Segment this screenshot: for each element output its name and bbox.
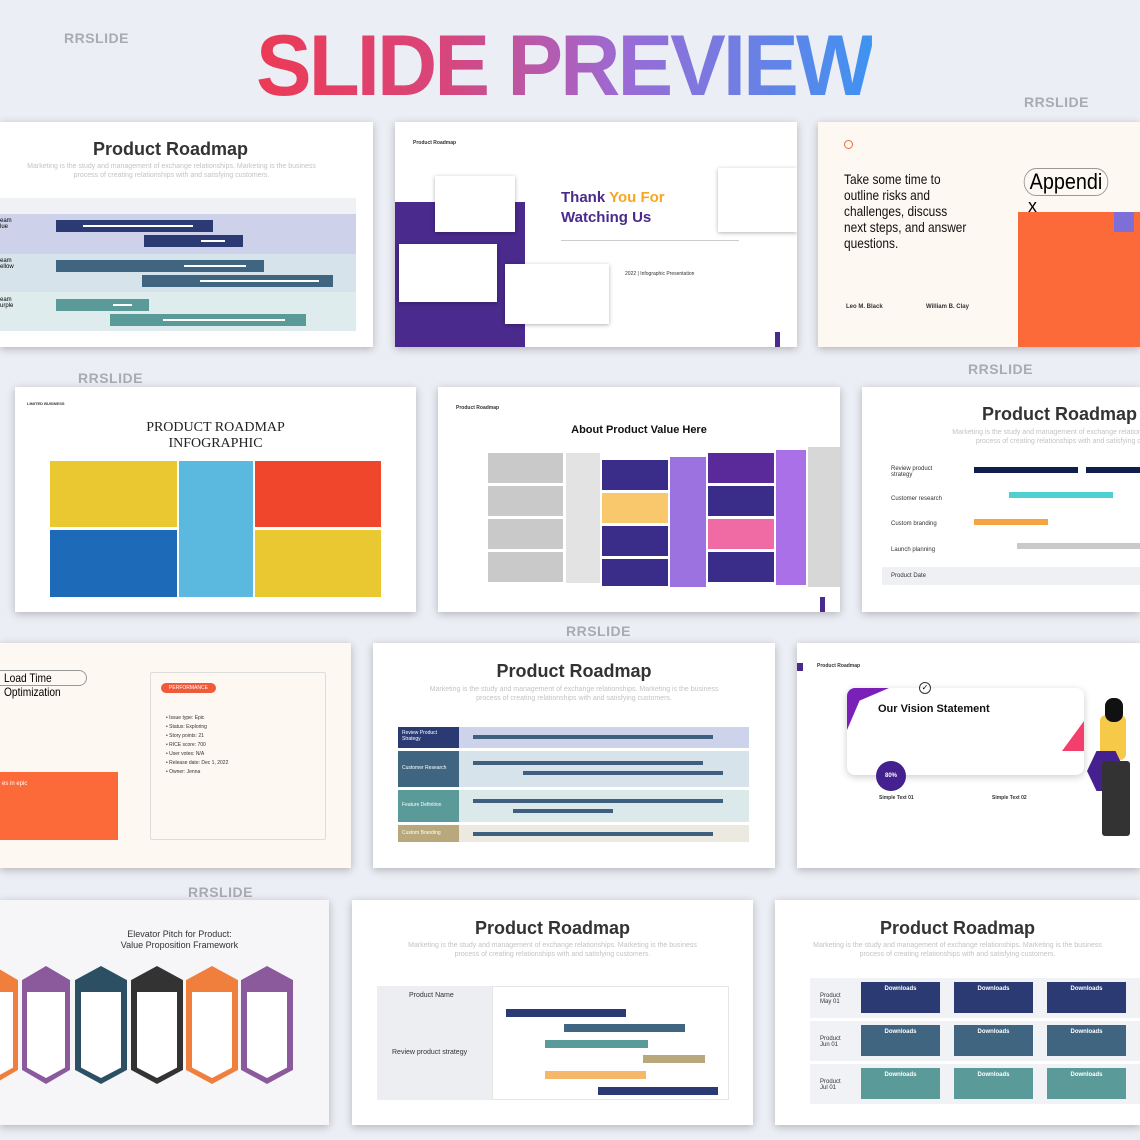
- slide 3: appendix: next steps, and answer: [844, 219, 966, 235]
- slide 3: appendix: questions.: [844, 235, 898, 251]
- slide 11: product roadmap timeline: Review product strategy: [392, 1049, 467, 1056]
- slide 12: product roadmap downloads grid: process of creating relationships with and satisfying customers.: [860, 951, 1055, 958]
- slide 8: product roadmap bands: Customer Research: [402, 765, 446, 771]
- slide 12: product roadmap downloads grid: Jul 01: [820, 1085, 836, 1091]
- slide 12: product roadmap downloads grid: Downloads: [977, 1072, 1010, 1078]
- slide 4: product roadmap infographic: [15, 387, 416, 612]
- title: SLIDE PREVIEW: [256, 18, 872, 114]
- slide 1: product roadmap gantt: Product Roadmap: [93, 139, 248, 159]
- slide 9: vision statement: Simple Text 01: [879, 795, 914, 801]
- slide 4: product roadmap infographic: PRODUCT ROADMAP: [146, 420, 285, 435]
- slide 2: thank you: Thank You For: [561, 189, 665, 206]
- watermark: RRSLIDE: [1024, 94, 1089, 110]
- slide 7: load time: • Story points: 21: [166, 733, 204, 739]
- slide 6: product roadmap gantt: Product Date: [891, 573, 926, 579]
- slide 8: product roadmap bands: Review Product Strategy: [402, 730, 437, 742]
- slide 7: load time: PERFORMANCE: [169, 685, 208, 691]
- slide 5: about product value: About Product Value Here: [571, 424, 707, 436]
- slide 3: appendix: x: [1028, 196, 1037, 216]
- slide 8: product roadmap bands: Product Roadmap: [496, 661, 652, 681]
- slide 9: vision statement: [797, 643, 1140, 868]
- watermark: RRSLIDE: [188, 884, 253, 900]
- slide 12: product roadmap downloads grid: Product: [820, 993, 841, 999]
- slide 7: load time: • Status: Exploring: [166, 724, 207, 730]
- slide 3: appendix: Leo M. Black: [846, 304, 883, 310]
- slide 11: product roadmap timeline: [352, 900, 753, 1125]
- slide 11: product roadmap timeline: Product Name: [409, 992, 454, 999]
- slide 10: hexagons: [0, 900, 329, 1125]
- slide 11: product roadmap timeline: Product Roadmap: [475, 918, 630, 938]
- slide 6: product roadmap gantt: Product Roadmap: [982, 404, 1137, 424]
- slide 2: thank you: 2022 | Infographic Presentation: [625, 271, 694, 277]
- slide 12: product roadmap downloads grid: Downloads: [1070, 1029, 1102, 1035]
- slide 8: product roadmap bands: Custom Branding: [402, 830, 441, 836]
- slide 6: product roadmap gantt: Launch planning: [891, 547, 935, 553]
- slide 11: product roadmap timeline: Marketing is the study and management of exchange relationships. Marketing is the business: [408, 942, 697, 949]
- slide 9: vision statement: 80%: [885, 773, 897, 779]
- slide 12: product roadmap downloads grid: Product: [820, 1036, 841, 1042]
- slide 12: product roadmap downloads grid: Product: [820, 1079, 841, 1085]
- slide 4: product roadmap infographic: INFOGRAPHIC: [168, 436, 263, 451]
- slide 12: product roadmap downloads grid: Downloads: [884, 1029, 916, 1035]
- slide 7: load time: • RICE score: 700: [166, 742, 206, 748]
- slide 8: product roadmap bands: [373, 643, 775, 868]
- slide 9: vision statement: Product Roadmap: [817, 663, 860, 669]
- slide 8: product roadmap bands: process of creating relationships with and satisfying customers.: [476, 695, 672, 702]
- slide 1: product roadmap gantt: [0, 122, 373, 347]
- slide 1: product roadmap gantt: eam: [0, 258, 12, 264]
- slide 12: product roadmap downloads grid: Downloads: [1070, 1072, 1102, 1078]
- slide 4: product roadmap infographic: LIMITED BUSINESS: [27, 401, 65, 406]
- slide 1: product roadmap gantt: ellow: [0, 264, 14, 270]
- slide 3: appendix: outline risks and: [844, 187, 930, 203]
- slide 1: product roadmap gantt: Marketing is the study and management of exchange relationships. Marketing is the business: [27, 163, 316, 170]
- slide 1: product roadmap gantt: eam: [0, 297, 12, 303]
- slide 12: product roadmap downloads grid: Downloads: [977, 986, 1010, 992]
- slide 3: appendix: [818, 122, 1140, 347]
- watermark: RRSLIDE: [968, 361, 1033, 377]
- slide 12: product roadmap downloads grid: Jun 01: [820, 1042, 838, 1048]
- slide 6: product roadmap gantt: Custom branding: [891, 521, 937, 527]
- slide 2: thank you: Watching Us: [561, 209, 651, 226]
- slide 7: load time: [0, 643, 351, 868]
- slide 8: product roadmap bands: Marketing is the study and management of exchange relationships. Marketing is the business: [430, 686, 718, 693]
- slide 7: load time: Load Time: [4, 671, 52, 685]
- slide 8: product roadmap bands: Feature Definition: [402, 802, 441, 808]
- slide 12: product roadmap downloads grid: Downloads: [1070, 986, 1102, 992]
- slide 1: product roadmap gantt: urple: [0, 303, 13, 309]
- slide 12: product roadmap downloads grid: Product Roadmap: [880, 918, 1035, 938]
- slide 12: product roadmap downloads grid: [775, 900, 1140, 1125]
- watermark: RRSLIDE: [566, 623, 631, 639]
- slide 1: product roadmap gantt: process of creating relationships with and satisfying customers.: [74, 172, 269, 179]
- slide 5: about product value: [438, 387, 840, 612]
- slide 9: vision statement: Our Vision Statement: [878, 703, 990, 715]
- slide 12: product roadmap downloads grid: Marketing is the study and management of exchange relationships. Marketing is the business: [813, 942, 1102, 949]
- watermark: RRSLIDE: [64, 30, 129, 46]
- slide 9: vision statement: ✓: [922, 683, 928, 692]
- slide 1: product roadmap gantt: eam: [0, 218, 12, 224]
- slide 12: product roadmap downloads grid: Downloads: [977, 1029, 1010, 1035]
- slide 3: appendix: William B. Clay: [926, 304, 969, 310]
- slide 7: load time: • Owner: Jenna: [166, 769, 200, 775]
- slide 11: product roadmap timeline: process of creating relationships with and satisfying customers.: [455, 951, 650, 958]
- slide 12: product roadmap downloads grid: Downloads: [884, 986, 916, 992]
- slide 6: product roadmap gantt: strategy: [891, 472, 912, 478]
- slide 7: load time: es in epic: [2, 781, 27, 787]
- slide 7: load time: • Issue type: Epic: [166, 715, 204, 721]
- slide 6: product roadmap gantt: Review product: [891, 466, 932, 472]
- slide 6: product roadmap gantt: Customer research: [891, 496, 942, 502]
- slide 3: appendix: challenges, discuss: [844, 203, 947, 219]
- slide 2: thank you: [395, 122, 797, 347]
- slide 7: load time: • Release date: Dec 1, 2022: [166, 760, 228, 766]
- slide 6: product roadmap gantt: [862, 387, 1140, 612]
- slide 12: product roadmap downloads grid: Downloads: [884, 1072, 916, 1078]
- slide 10: hexagons: Value Proposition Framework: [121, 940, 238, 950]
- slide 12: product roadmap downloads grid: May 01: [820, 999, 840, 1005]
- slide 2: thank you: Product Roadmap: [413, 140, 456, 146]
- slide 10: hexagons: Elevator Pitch for Product:: [127, 929, 232, 939]
- slide 3: appendix: Take some time to: [844, 171, 941, 187]
- slide 1: product roadmap gantt: lue: [0, 224, 8, 230]
- slide 7: load time: • User votes: N/A: [166, 751, 204, 757]
- slide 7: load time: Optimization: [4, 685, 61, 699]
- watermark: RRSLIDE: [78, 370, 143, 386]
- slide 5: about product value: Product Roadmap: [456, 405, 499, 411]
- slide 3: appendix: Appendi: [1030, 169, 1102, 194]
- slide 9: vision statement: Simple Text 02: [992, 795, 1027, 801]
